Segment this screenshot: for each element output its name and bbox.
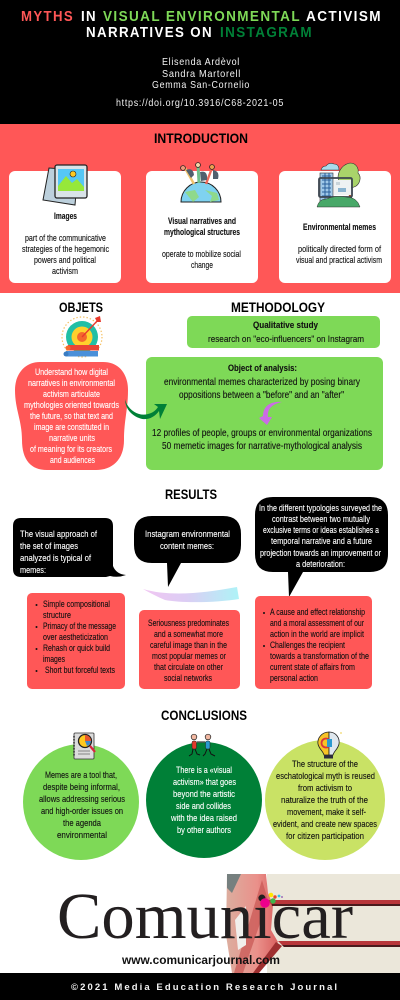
card: images: powers and political: [34, 255, 96, 266]
speech bubble 2: content memes:: [160, 541, 214, 552]
box: qualitative study: [187, 316, 380, 348]
red box 1: Primacy of the message: [43, 621, 116, 632]
logo dots: [260, 893, 283, 908]
objective blob: narratives in environmental: [28, 378, 115, 389]
icon: notebook with magnifier: [74, 733, 95, 759]
red box 1: [27, 593, 125, 689]
title: IN: [81, 9, 97, 25]
red box 1: Simple compositional: [43, 599, 110, 610]
card: visual narratives: change: [191, 260, 213, 271]
circle: conclusion 1: allows addressing serious: [39, 794, 125, 805]
red box 3: current state of affairs from: [270, 662, 355, 673]
card: visual narratives: operate to mobilize social: [162, 249, 241, 260]
circle: conclusion 2: There is a «visual: [176, 765, 232, 776]
card: visual narratives: Visual narratives and: [168, 216, 236, 227]
box: object of analysis: [146, 357, 383, 470]
red box 2: careful image than in the: [150, 640, 227, 651]
box: object of analysis: oppositions between a "before" and an "after": [179, 389, 344, 401]
website: www.comunicarjournal.com: [121, 955, 280, 967]
circle: conclusion 2: side and collides: [176, 801, 231, 812]
objective blob: activism articulate: [43, 389, 100, 400]
circle: conclusion 3: from activism to: [298, 783, 352, 794]
red box 1: images: [43, 654, 65, 665]
heading: conclusions: CONCLUSIONS: [161, 707, 247, 723]
circle: conclusion 3: [265, 732, 385, 860]
arrow: green curved: [125, 399, 167, 419]
heading: results: RESULTS: [165, 486, 217, 502]
panel: methodology: [125, 299, 383, 470]
speech bubble 3: a deterioration:: [296, 559, 345, 570]
circle: conclusion 2: beyond the artistic: [173, 789, 235, 800]
red box 3: action in the world are implicit: [270, 629, 364, 640]
objective blob: of meaning for its creators: [30, 444, 112, 455]
red box 1: over aestheticization: [43, 632, 108, 643]
box: qualitative study: Qualitative study: [253, 320, 319, 331]
objective blob: the future, so that text and: [30, 411, 113, 422]
panel: introduction: [0, 124, 400, 293]
speech bubble 3: temporal narrative and a future: [271, 536, 372, 547]
panel: objectives: [15, 299, 128, 470]
speech bubble 2: Instagram environmental: [145, 529, 230, 540]
card: images: part of the communicative: [25, 233, 106, 244]
box: object of analysis: Object of analysis:: [228, 363, 297, 374]
authors: Gemma San-Cornelio: [152, 79, 250, 91]
card: visual narratives: mythological structures: [164, 227, 240, 238]
objective blob: Understand how digital: [35, 367, 108, 378]
footer band: ©2021 Media Education Research Journal: [71, 982, 337, 993]
red box 2: and a somewhat more: [154, 629, 223, 640]
icon: globe with pins: [181, 163, 221, 202]
icon: two people: [189, 734, 215, 756]
heading: introduction: INTRODUCTION: [154, 130, 248, 146]
red box 3: Challenges the recipient: [270, 640, 345, 651]
red box 2: that circulate on other: [154, 662, 224, 673]
red box 3: towards a transformation of the: [270, 651, 369, 662]
authors: Sandra Martorell: [162, 68, 241, 80]
authors: Elisenda Ardèvol: [162, 56, 240, 68]
red box 1: Rehash or quick build: [43, 643, 110, 654]
logo: Comunicar: Comunicar: [57, 880, 353, 953]
circle: conclusion 1: [23, 733, 139, 860]
title: [21, 9, 382, 41]
speech bubble 1: [13, 518, 126, 577]
circle: conclusion 3: eschatological myth is reused: [276, 771, 375, 782]
red box 2: social networks: [164, 673, 212, 684]
red box 3: [255, 596, 372, 689]
speech bubble 1: analyzed is typical of: [20, 553, 91, 564]
card: environmental memes: [279, 163, 391, 283]
red box 2: [139, 610, 240, 689]
objective blob: [15, 362, 128, 470]
authors: [152, 56, 250, 91]
title: MYTHS: [21, 9, 74, 25]
box: qualitative study: research on "eco-influencers" on Instagram: [208, 334, 364, 345]
panel: results: [13, 486, 388, 689]
objective blob: narrative units: [49, 433, 95, 444]
red box 3: A cause and effect relationship: [270, 607, 365, 618]
arrow: pink curved: [259, 402, 282, 425]
circle: conclusion 1: despite being informal,: [43, 782, 120, 793]
title: VISUAL ENVIRONMENTAL: [103, 9, 301, 25]
book photo: [226, 874, 400, 973]
header band: [0, 0, 400, 124]
circle: conclusion 1: and high-order issues on: [41, 806, 123, 817]
objective blob: and audiences: [50, 455, 95, 466]
circle: conclusion 2: with the idea raised: [170, 813, 237, 824]
title: INSTAGRAM: [220, 25, 313, 41]
circle: conclusion 2: [146, 734, 262, 858]
speech bubble 1: The visual approach of: [20, 529, 97, 540]
card: images: [9, 165, 121, 283]
red box 2: most popular memes or: [152, 651, 227, 662]
card: images: Images: [54, 211, 77, 222]
circle: conclusion 3: movement, make it self-: [287, 807, 366, 818]
title: NARRATIVES ON: [86, 25, 213, 41]
speech bubble 1: the set of images: [20, 541, 78, 552]
panel: conclusions: [23, 707, 385, 860]
red box 3: and a moral assessment of our: [270, 618, 365, 629]
red box 3: personal action: [270, 673, 318, 684]
circle: conclusion 3: The structure of the: [292, 759, 358, 770]
circle: conclusion 1: Memes are a tool that,: [45, 770, 117, 781]
icon: target and books: [62, 316, 102, 357]
circle: conclusion 2: activism» that goes: [173, 777, 236, 788]
footer band: [0, 973, 400, 1000]
title: ACTIVISM: [306, 9, 382, 25]
speech bubble 3: [255, 497, 388, 597]
brush stroke: [143, 587, 239, 602]
card: visual narratives: [146, 163, 258, 283]
circle: conclusion 3: naturalize the truth of the: [281, 795, 368, 806]
icon: photos: [43, 165, 87, 205]
speech bubble 3: contrast between two mutually: [272, 514, 370, 525]
red box 1: structure: [43, 610, 71, 621]
doi: https://doi.org/10.3916/C68-2021-05: [116, 97, 284, 109]
red box 1: Short but forceful texts: [45, 665, 115, 676]
speech bubble 2: [134, 516, 241, 587]
icon: light bulb: [318, 732, 342, 758]
card: images: strategies of the hegemonic: [22, 244, 109, 255]
card: images: activism: [52, 266, 78, 277]
speech bubble 1: memes:: [20, 565, 46, 576]
circle: conclusion 2: by other authors: [177, 825, 231, 836]
logo block: [57, 874, 400, 973]
objective blob: image are constituted in: [34, 422, 109, 433]
icon: meme tablet with tree: [317, 163, 360, 207]
red box 2: Seriousness predominates: [148, 618, 229, 629]
objective blob: mythologies oriented towards: [24, 400, 119, 411]
heading: methodology: METHODOLOGY: [231, 299, 326, 315]
circle: conclusion 3: for citizen participation: [286, 831, 364, 842]
circle: conclusion 1: the agenda: [63, 818, 102, 829]
circle: conclusion 1: environmental: [57, 830, 107, 841]
heading: objets: OBJETS: [59, 299, 103, 315]
